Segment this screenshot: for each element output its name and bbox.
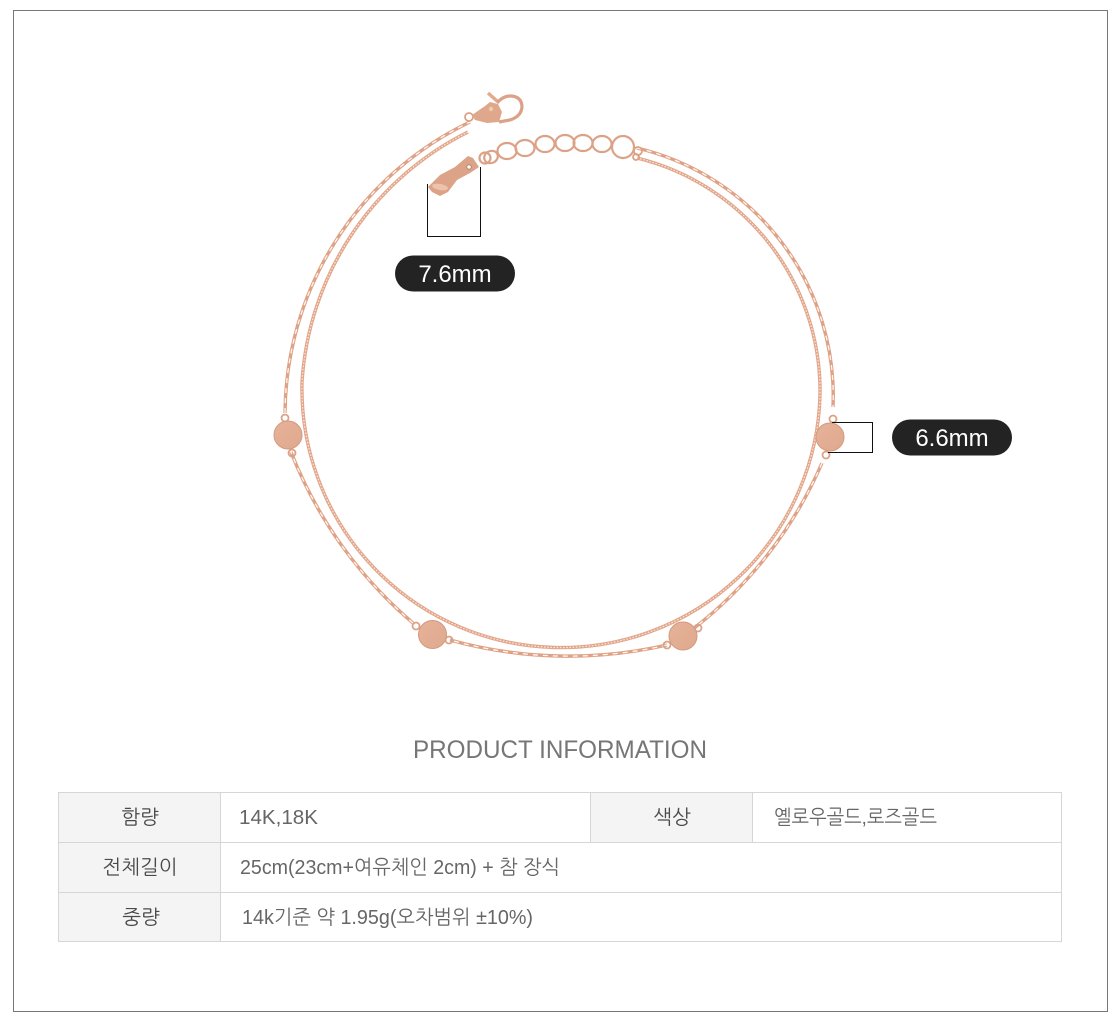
bracelet illustration <box>274 93 844 656</box>
row 3: 14k기준 약 1.95g(오차범위 ±10%) <box>242 907 533 929</box>
measure label: 7.6mm <box>395 256 515 292</box>
row 1: 함량 <box>121 807 159 829</box>
round charms <box>274 421 844 650</box>
row 3: 중량 <box>122 907 160 929</box>
measure bracket: tag width <box>428 167 480 236</box>
product information table <box>58 792 1062 942</box>
header cell backgrounds <box>58 792 752 942</box>
extender chain <box>480 135 642 165</box>
cable chain <box>285 122 833 656</box>
row 1: 14K,18K <box>239 807 319 829</box>
measure bracket: charm diameter <box>828 422 872 452</box>
row 1 <box>121 807 937 829</box>
heading: product information: PRODUCT INFORMATION <box>413 736 707 764</box>
row 1: 옐로우골드,로즈골드 <box>774 807 937 829</box>
charm jump rings <box>282 414 836 648</box>
row 2: 25cm(23cm+여유체인 2cm) + 참 장식 <box>240 857 560 879</box>
table grid <box>58 792 1062 942</box>
row 2: 전체길이 <box>102 857 178 879</box>
wavy tag <box>428 156 479 196</box>
measure label: 6.6mm <box>892 420 1012 456</box>
measure label: 6.6mm: 6.6mm <box>915 425 989 452</box>
measure label: 7.6mm: 7.6mm <box>418 261 492 288</box>
curb chain <box>302 132 820 648</box>
row 1: 색상 <box>653 807 691 829</box>
row 2 <box>102 857 560 879</box>
lobster clasp <box>465 93 522 123</box>
